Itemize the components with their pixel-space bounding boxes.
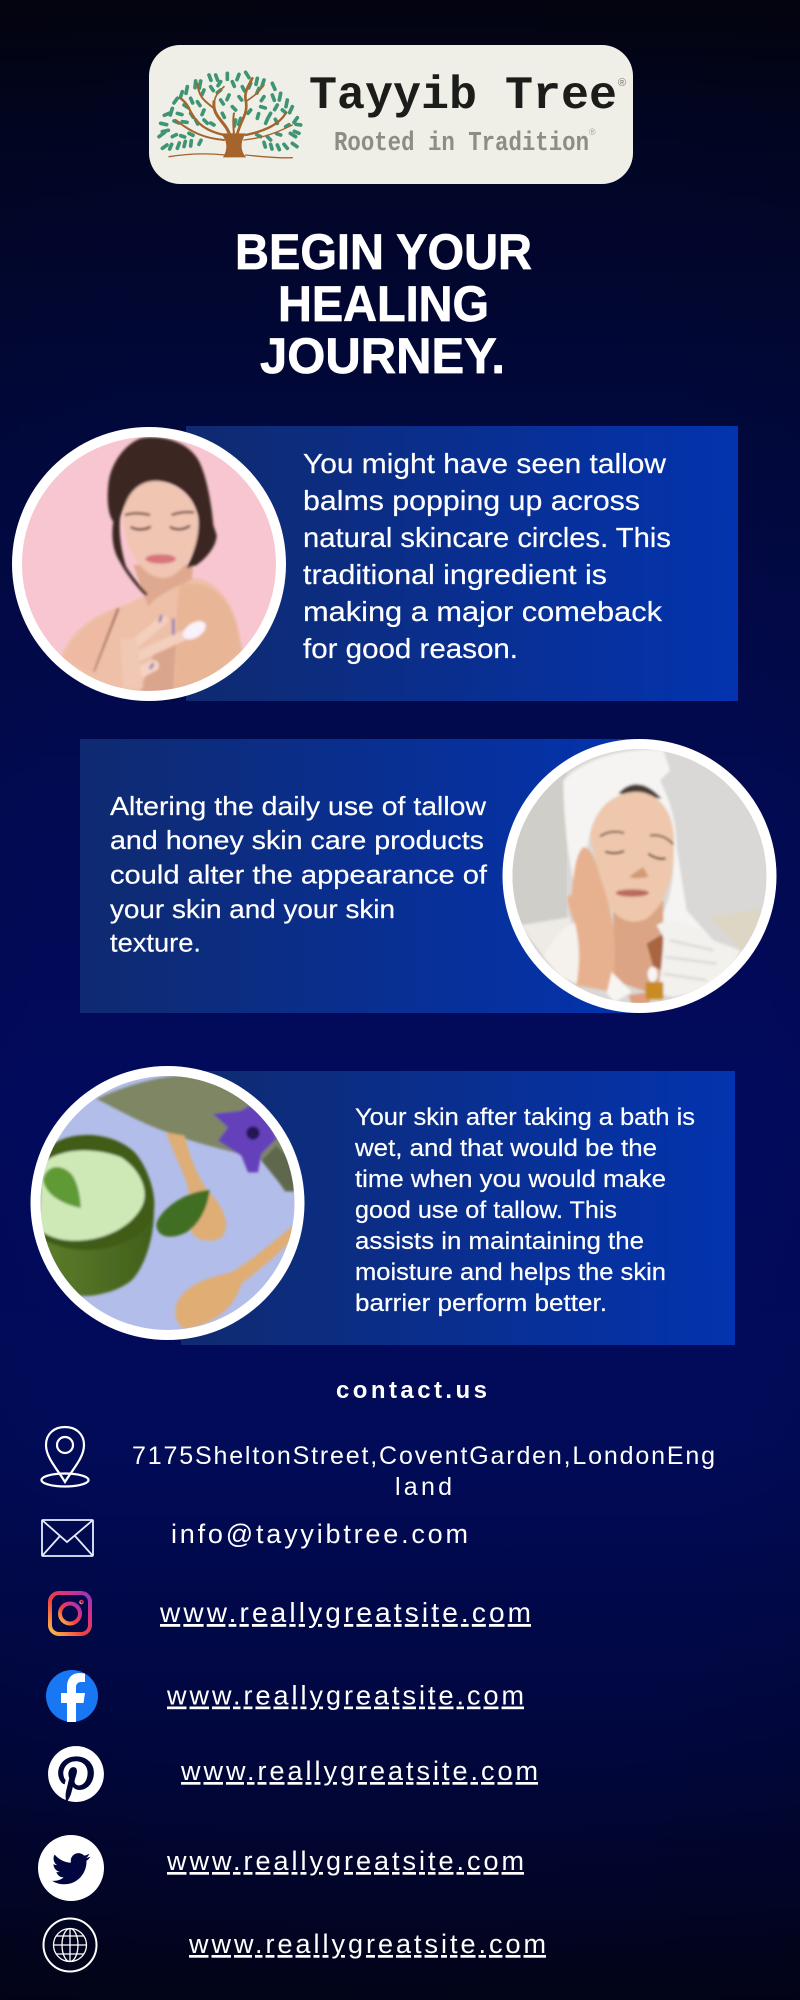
paragraph: making a major comeback bbox=[303, 596, 663, 627]
icon: envelope bbox=[42, 1520, 93, 1556]
paragraph: natural skincare circles. This bbox=[303, 522, 671, 553]
paragraph: assists in maintaining the bbox=[355, 1228, 644, 1255]
title: HEALING bbox=[278, 276, 489, 332]
logo badge bbox=[149, 45, 633, 184]
icon: location pin bbox=[42, 1427, 88, 1486]
paragraph: and honey skin care products bbox=[110, 825, 484, 855]
title bbox=[235, 224, 532, 384]
title: BEGIN YOUR bbox=[235, 224, 532, 280]
contact heading: contact.us bbox=[336, 1377, 487, 1404]
link: www.reallygreatsite.com bbox=[166, 1846, 524, 1876]
panel background bbox=[186, 426, 738, 701]
paragraph bbox=[303, 448, 671, 664]
photo: woman with towel bbox=[500, 737, 780, 1017]
paragraph: your skin and your skin bbox=[110, 894, 395, 924]
contact: twitter bbox=[38, 1835, 524, 1901]
brand name: Tayyib Tree bbox=[309, 70, 617, 122]
paragraph bbox=[110, 791, 488, 958]
contact: website bbox=[44, 1918, 546, 1972]
contact: email bbox=[42, 1519, 468, 1556]
link: www.reallygreatsite.com bbox=[180, 1756, 538, 1786]
paragraph bbox=[354, 1104, 695, 1317]
paragraph: Altering the daily use of tallow bbox=[110, 791, 486, 821]
address text bbox=[132, 1442, 715, 1501]
paragraph: time when you would make bbox=[355, 1166, 666, 1193]
tagline: Rooted in Tradition bbox=[334, 129, 589, 159]
paragraph: Your skin after taking a bath is bbox=[355, 1104, 695, 1131]
link: www.reallygreatsite.com bbox=[159, 1597, 531, 1628]
contact: address bbox=[42, 1427, 715, 1501]
title: JOURNEY. bbox=[260, 328, 505, 384]
registered mark: ® bbox=[618, 77, 626, 89]
paragraph: could alter the appearance of bbox=[110, 860, 488, 890]
paragraph: wet, and that would be the bbox=[354, 1135, 657, 1162]
paragraph: texture. bbox=[110, 928, 201, 958]
paragraph: balms popping up across bbox=[303, 485, 640, 516]
contact: facebook bbox=[46, 1670, 524, 1722]
panel background bbox=[181, 1071, 735, 1345]
registered mark small: ® bbox=[589, 127, 596, 137]
address text: land bbox=[395, 1473, 452, 1501]
link: www.reallygreatsite.com bbox=[166, 1680, 524, 1710]
paragraph: for good reason. bbox=[303, 633, 518, 664]
panel: tallow balms bbox=[10, 425, 738, 705]
paragraph: You might have seen tallow bbox=[303, 448, 667, 479]
paragraph: traditional ingredient is bbox=[303, 559, 607, 590]
icon: twitter bbox=[38, 1835, 104, 1901]
paragraph: barrier perform better. bbox=[355, 1290, 607, 1317]
icon: tree logo bbox=[159, 72, 301, 158]
icon: pinterest bbox=[48, 1746, 104, 1802]
photo: woman applying cream bbox=[10, 425, 290, 705]
icon: facebook bbox=[46, 1670, 98, 1722]
contact: pinterest bbox=[48, 1746, 538, 1802]
panel: after bath bbox=[28, 1064, 735, 1345]
contact: instagram bbox=[50, 1593, 531, 1634]
link: www.reallygreatsite.com bbox=[188, 1929, 546, 1959]
email text: info@tayyibtree.com bbox=[171, 1519, 468, 1549]
address text: 7175SheltonStreet,CoventGarden,LondonEng bbox=[132, 1442, 715, 1470]
paragraph: moisture and helps the skin bbox=[355, 1259, 666, 1286]
paragraph: good use of tallow. This bbox=[355, 1197, 617, 1224]
icon: globe bbox=[44, 1918, 96, 1972]
photo: green balm jar bbox=[28, 1064, 308, 1344]
icon: instagram bbox=[50, 1593, 90, 1634]
panel background bbox=[80, 739, 640, 1013]
panel: altering daily use bbox=[80, 737, 780, 1017]
